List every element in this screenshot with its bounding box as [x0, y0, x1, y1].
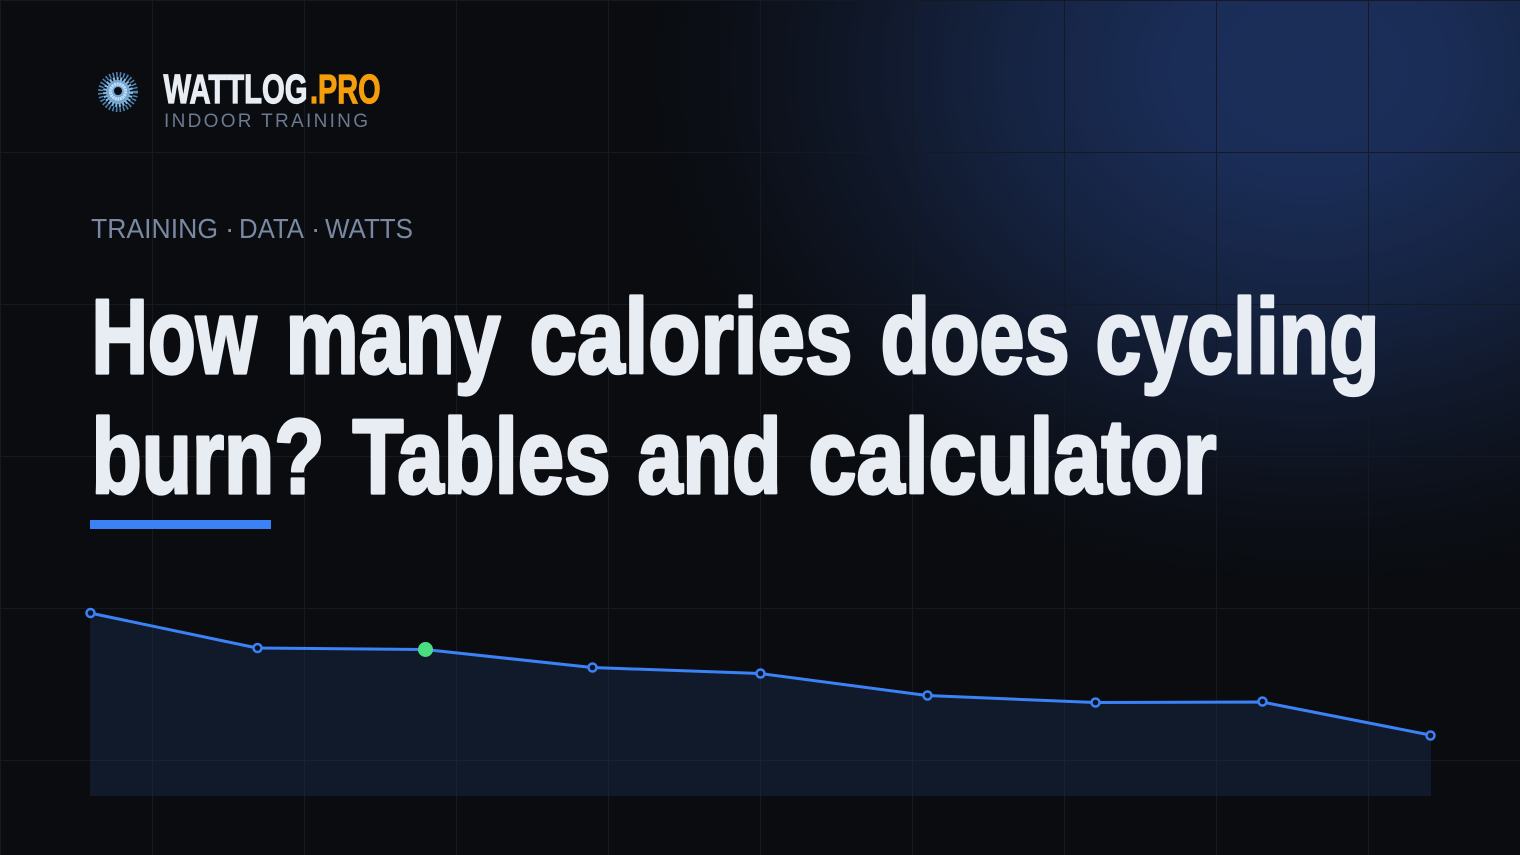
- logo: [100, 66, 380, 132]
- eyebrow: DATA: [239, 213, 304, 244]
- chart area: [90, 613, 1431, 796]
- title line 2: [92, 398, 1216, 516]
- title line 1: cycling: [1096, 278, 1380, 396]
- chart line: [90, 613, 1430, 735]
- eyebrow: [91, 213, 413, 244]
- brand suffix: .PRO: [310, 66, 380, 112]
- eyebrow: TRAINING: [91, 213, 218, 244]
- title line 2: and: [638, 398, 782, 516]
- eyebrow: ·: [225, 213, 234, 244]
- eyebrow: ·: [311, 213, 320, 244]
- title line 1: does: [880, 278, 1070, 396]
- line chart: [86, 609, 1434, 796]
- title line 1: many: [286, 278, 501, 396]
- title line 1: [92, 278, 1380, 396]
- title line 2: calculator: [808, 398, 1216, 516]
- title underline accent: [90, 520, 271, 529]
- tagline: INDOOR TRAINING: [164, 111, 368, 132]
- title: [92, 278, 1380, 516]
- title line 1: How: [92, 278, 257, 396]
- title line 2: Tables: [352, 398, 610, 516]
- title line 2: burn?: [92, 398, 324, 516]
- title line 1: calories: [530, 278, 852, 396]
- brand name: WATTLOG: [164, 66, 308, 112]
- icon: cassette gear: [100, 74, 136, 110]
- data points: [86, 609, 1434, 740]
- highlighted point: [418, 642, 433, 657]
- eyebrow: WATTS: [325, 213, 413, 244]
